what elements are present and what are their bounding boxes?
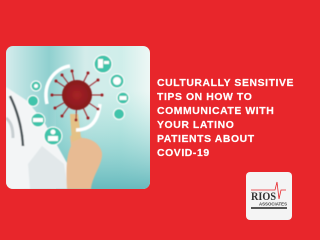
logo: Rios Associates: RIOS [251, 189, 276, 203]
title: COVID-19 [157, 148, 210, 159]
logo: Rios Associates: ASSOCIATES [259, 202, 287, 206]
icon: virus [51, 70, 103, 121]
progress ring [46, 66, 100, 130]
title: CULTURALLY SENSITIVE [157, 78, 294, 89]
title: YOUR LATINO [157, 120, 234, 131]
hand pointing [66, 114, 102, 189]
panel: photo of doctor pointing at virus [6, 46, 150, 189]
doctor coat [6, 87, 68, 189]
title: PATIENTS ABOUT [157, 134, 255, 145]
title [157, 78, 294, 159]
title: TIPS ON HOW TO [157, 92, 252, 103]
icon glyphs [33, 59, 126, 141]
icons: teal circles [28, 55, 129, 145]
title: COMMUNICATE WITH [157, 106, 274, 117]
logo: Rios Associates [246, 172, 292, 220]
